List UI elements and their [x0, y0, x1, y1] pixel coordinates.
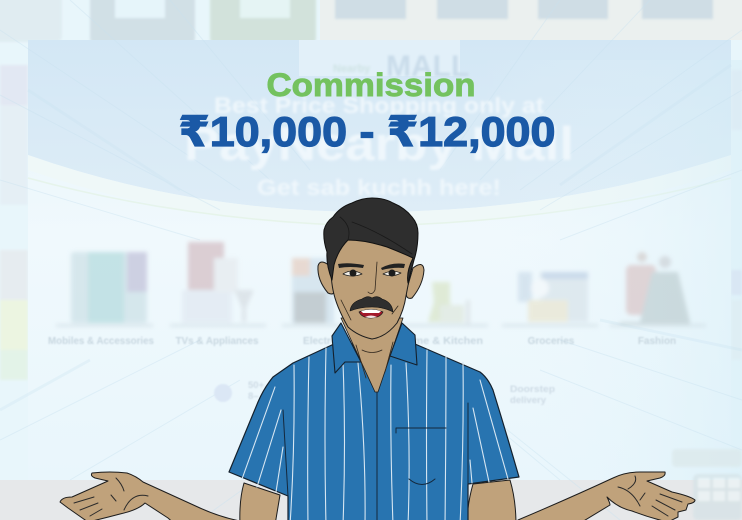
eyes [343, 270, 401, 276]
blurred service strip: 8– [248, 391, 259, 402]
collar [332, 323, 417, 373]
product: fashion [620, 252, 690, 325]
neck and face lines [341, 262, 398, 378]
blurred category labels: Groceries [528, 336, 575, 347]
product: kitchen [428, 282, 470, 324]
blurred headline text: Best Price Shopping only at [214, 93, 545, 118]
blurred service strip [214, 380, 555, 406]
blurred headline text [184, 93, 574, 200]
blurred headline text: PayNearby Mall [184, 117, 574, 170]
shirt stripes [242, 348, 508, 520]
logo panel [299, 40, 469, 83]
blurred service strip: delivery [510, 395, 547, 406]
blurred category labels: Home & Kitchen [399, 336, 483, 347]
product: appliances [182, 242, 254, 323]
commission amount: ₹10,000 - ₹12,000 [178, 108, 556, 155]
blurred product shelves [56, 242, 706, 327]
keyboard shape [672, 449, 742, 520]
blurred category labels [48, 336, 676, 347]
neck [341, 318, 403, 392]
product: electronics [292, 258, 334, 323]
blurred service strip: 50+ [248, 380, 265, 391]
right arm and hand [467, 472, 695, 520]
face [330, 235, 414, 339]
character: shopkeeper [60, 198, 695, 520]
blurred headline text: Get sab kuchh here! [257, 175, 501, 200]
blurred category labels: Fashion [638, 336, 676, 347]
floor [0, 480, 742, 520]
eyebrows [338, 263, 405, 270]
blurred service strip: Doorstep [510, 384, 555, 395]
moustache [350, 297, 393, 312]
product: groceries [518, 272, 588, 322]
left arm and hand [60, 472, 280, 520]
shirt seams and pocket [283, 390, 468, 520]
logo panel: MALL [386, 50, 469, 83]
title: Commission: Commission [266, 67, 476, 103]
mouth [359, 310, 383, 318]
product: mobiles [71, 252, 147, 323]
ears [318, 262, 424, 298]
blurred category labels: Electronics [303, 336, 357, 347]
blurred category labels: TVs & Appliances [176, 336, 259, 347]
blurred category labels: Mobiles & Accessories [48, 336, 154, 347]
logo panel: Nearby [333, 63, 371, 75]
hair [324, 198, 418, 283]
shirt body [229, 344, 519, 520]
